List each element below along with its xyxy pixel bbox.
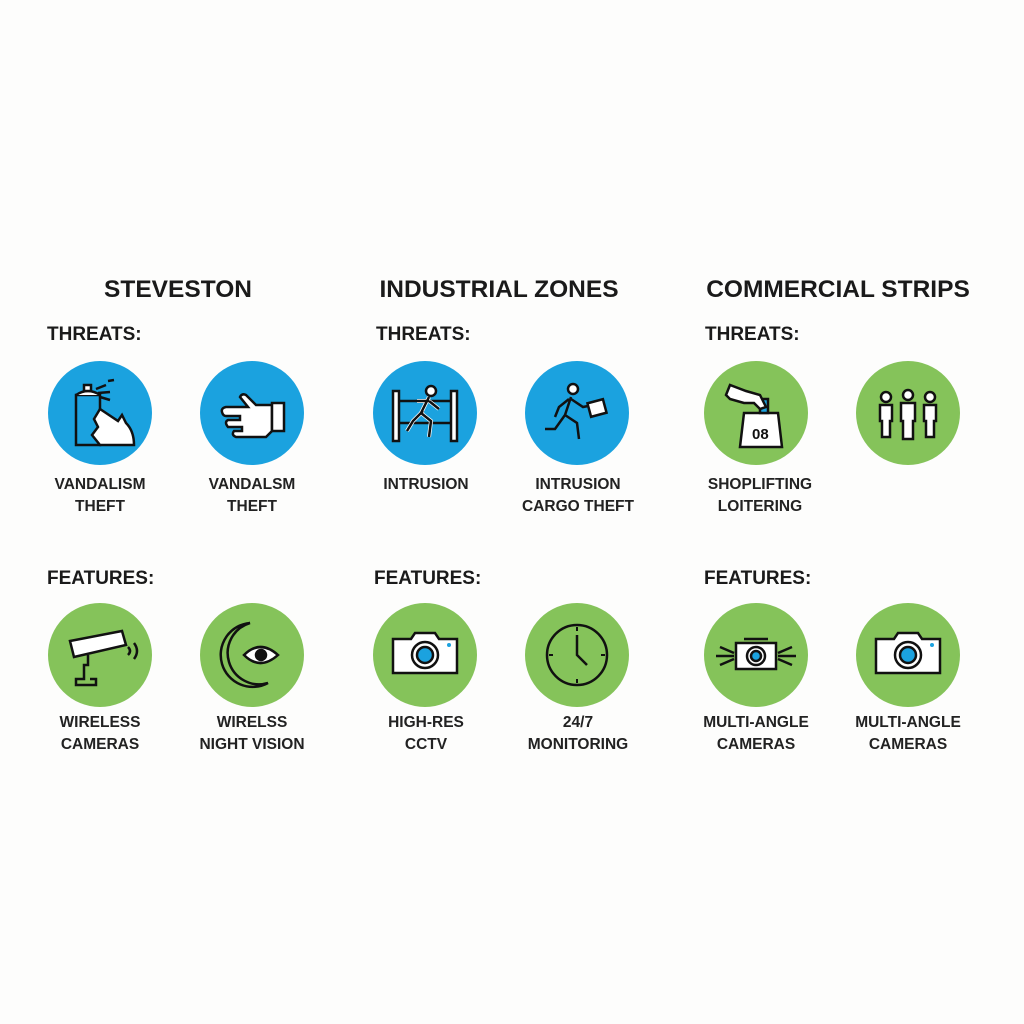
icon: shoplifting bag [704,361,808,465]
subheading: features col2: FEATURES: [374,568,481,589]
labels: threats: VANDALISM [54,476,146,493]
text: WIRELSS [217,714,287,731]
icon: intrusion fence [373,361,477,465]
heading: Commercial Strips: COMMERCIAL STRIPS [706,276,970,303]
icon: multi-angle camera [704,603,808,707]
text: CCTV [405,736,447,753]
text: INTRUSION [535,476,621,493]
labels: features [60,714,140,753]
text: 24/7 [563,714,593,731]
subheading: threats col2: THREATS: [376,324,471,345]
text: MULTI-ANGLE [855,714,961,731]
heading: Steveston: STEVESTON [104,276,252,303]
labels: features: WIRELESS [60,714,140,731]
icon: camera [856,603,960,707]
icon: shoplifting bag: 08 [752,426,769,443]
text: MONITORING [528,736,628,753]
subheading: features col3: FEATURES: [704,568,811,589]
text: VANDALSM [209,476,295,493]
subheading: threats col3: THREATS: [705,324,800,345]
icon: clock [525,603,629,707]
text: CAMERAS [717,736,795,753]
icon: loitering people [856,361,960,465]
text: INTRUSION [383,476,469,493]
text: SHOPLIFTING [708,476,812,493]
subheading: features col1: FEATURES: [47,568,154,589]
text: HIGH-RES [388,714,464,731]
icon: spray can vandalism [48,361,152,465]
text: CAMERAS [869,736,947,753]
text: THEFT [227,498,277,515]
labels: threats [54,476,146,515]
labels: features: CAMERAS [61,736,139,753]
icon: running with cargo [525,361,629,465]
labels: threats: THEFT [75,498,125,515]
icon: hi-res camera [373,603,477,707]
text: LOITERING [718,498,802,515]
subheading: threats col1: THREATS: [47,324,142,345]
icon: hand theft [200,361,304,465]
text: MULTI-ANGLE [703,714,809,731]
icon: night vision [200,603,304,707]
text: CARGO THEFT [522,498,634,515]
icon: wireless camera [48,603,152,707]
heading: Industrial Zones: INDUSTRIAL ZONES [379,276,619,303]
text: NIGHT VISION [199,736,305,753]
